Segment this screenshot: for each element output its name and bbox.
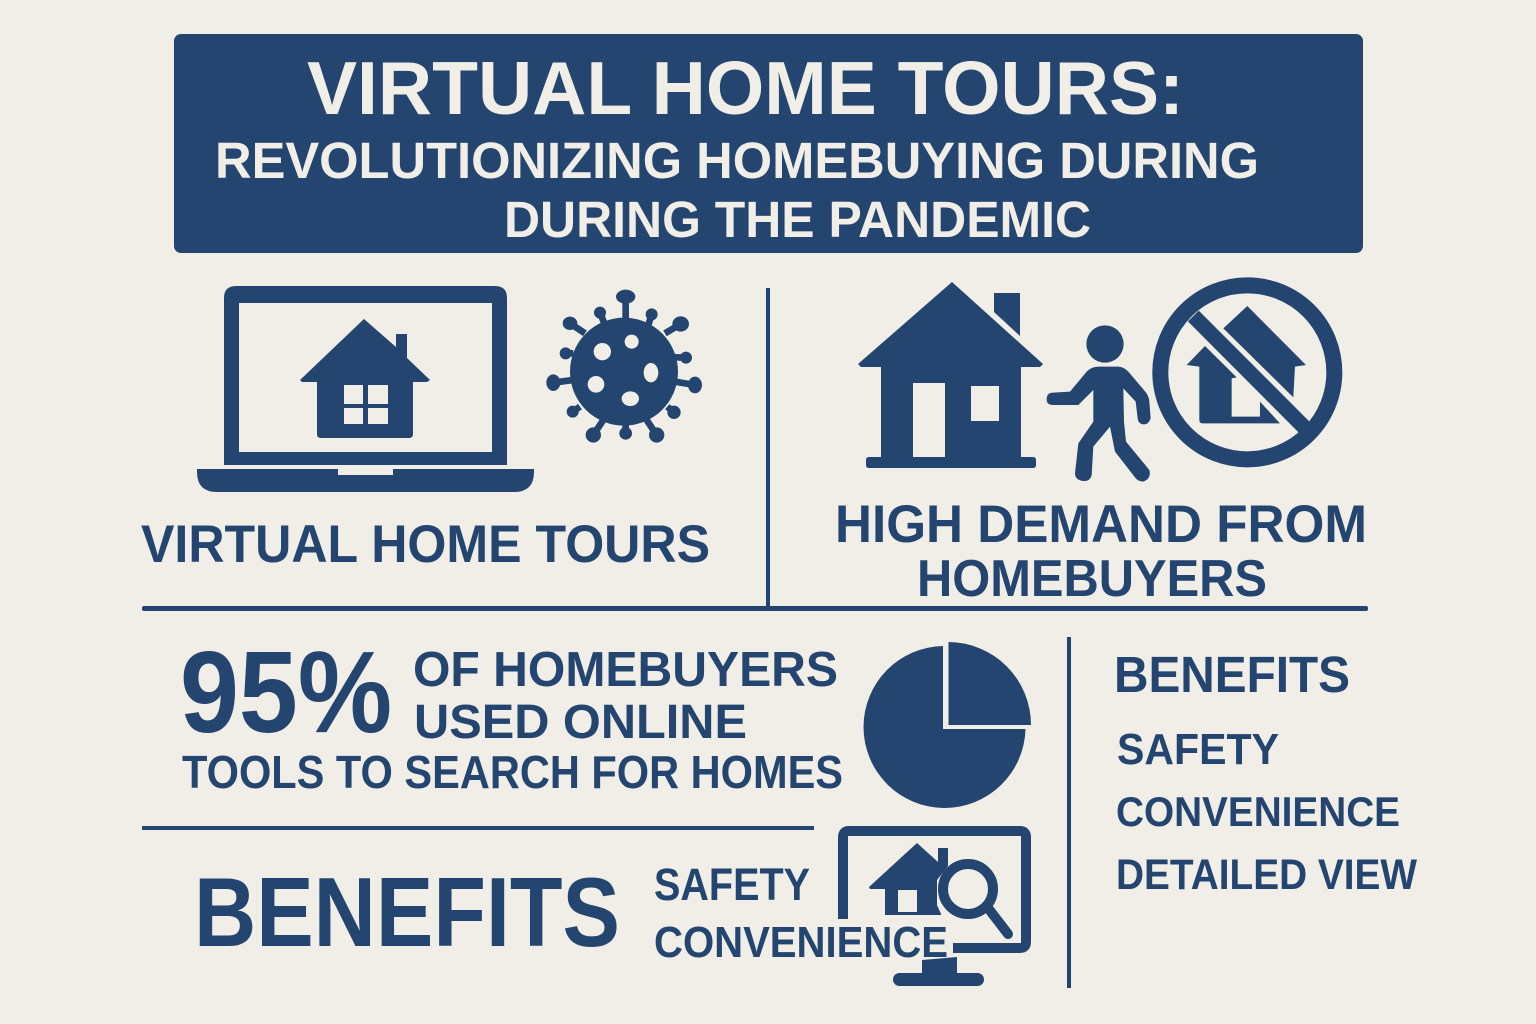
list: benefits: SAFETY — [654, 859, 810, 910]
label: high demand from homebuyers — [835, 495, 1367, 608]
statistic caption: TOOLS TO SEARCH FOR HOMES — [182, 746, 843, 798]
list: benefits — [1116, 725, 1417, 899]
icon: no house sign — [1160, 285, 1334, 459]
statistic: 95%: 95% — [180, 627, 392, 757]
panel: high demand — [835, 282, 1367, 608]
icon: house — [858, 282, 1043, 468]
panel: benefits lower left — [194, 831, 1026, 986]
label: high demand from homebuyers: HOMEBUYERS — [917, 550, 1267, 608]
icon: walking person — [1047, 325, 1151, 482]
icon: virus — [546, 290, 702, 443]
vertical divider top — [766, 288, 770, 608]
subtitle line 2: DURING THE PANDEMIC — [504, 191, 1091, 248]
horizontal divider middle — [142, 606, 1368, 611]
heading: benefits: BENEFITS — [1114, 646, 1350, 703]
panel: benefits right — [1114, 646, 1417, 899]
icon: monitor with house and magnifier — [843, 831, 1026, 986]
list: benefits: CONVENIENCE — [1116, 788, 1400, 835]
statistic caption — [182, 643, 843, 798]
panel: 95 percent statistic — [180, 627, 1031, 808]
statistic caption: OF HOMEBUYERS — [413, 643, 838, 697]
horizontal divider lower left — [142, 826, 814, 830]
list: benefits: DETAILED VIEW — [1116, 851, 1417, 899]
title banner — [174, 34, 1363, 253]
subtitle line 1: REVOLUTIONIZING HOMEBUYING DURING — [215, 132, 1259, 189]
vertical divider lower right — [1067, 637, 1071, 988]
list: benefits — [654, 859, 948, 967]
statistic caption: USED ONLINE — [414, 696, 747, 749]
title: VIRTUAL HOME TOURS: — [307, 46, 1184, 130]
list: benefits: SAFETY — [1117, 725, 1279, 774]
pie chart — [864, 642, 1031, 808]
heading: benefits: BENEFITS — [194, 857, 620, 967]
icon: laptop with house — [197, 286, 534, 492]
label: high demand from homebuyers: HIGH DEMAND FROM — [835, 495, 1367, 554]
panel: virtual home tours — [141, 286, 710, 574]
label: virtual home tours: VIRTUAL HOME TOURS — [141, 515, 710, 574]
list: benefits: CONVENIENCE — [654, 918, 948, 967]
